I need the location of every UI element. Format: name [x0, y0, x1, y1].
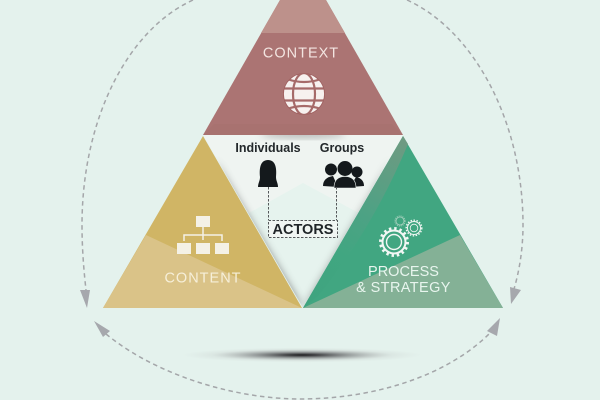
center triangle: actors: [203, 130, 403, 308]
label: context: CONTEXT: [263, 46, 339, 62]
top triangle: context: [203, 0, 403, 135]
label: Groups: Groups: [320, 141, 364, 155]
icon: group of people: [323, 161, 364, 188]
right triangle: process and strategy: [303, 136, 503, 308]
icon: gears: [380, 216, 422, 256]
ground shadow: [182, 348, 422, 362]
actors label box: ACTORS: [273, 222, 334, 238]
label: strategy: & STRATEGY: [356, 280, 451, 296]
label: Individuals: Individuals: [235, 141, 301, 155]
label: content: CONTENT: [164, 270, 242, 286]
icon: individual person: [258, 160, 278, 187]
arrowheads: [80, 287, 521, 337]
connector lines: [268, 187, 336, 220]
dashed cycle arcs: [82, 0, 523, 399]
left triangle: content: [103, 136, 302, 308]
icon: globe: [283, 73, 325, 115]
label: process: PROCESS: [368, 264, 439, 280]
icon: org chart: [177, 216, 229, 254]
